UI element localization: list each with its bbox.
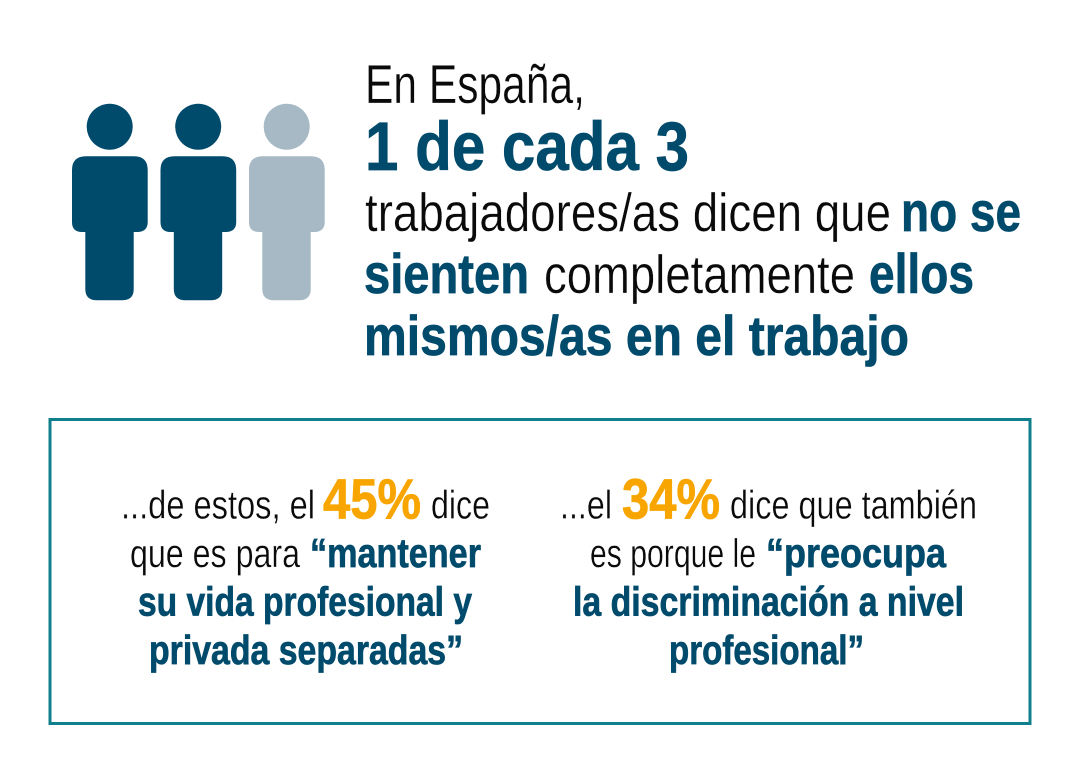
- heading line: trabajadores: trabajadores/as dicen que: [365, 183, 891, 243]
- line with 34% figure: dice que también: [730, 484, 977, 528]
- heading line: sienten completamente ellos: completamente: [544, 245, 855, 305]
- heading line: sienten completamente ellos: [364, 242, 974, 305]
- heading line: En España: En España,: [365, 53, 585, 115]
- text block: 45% statistic: “mantener: [310, 530, 481, 576]
- heading line: 1 de cada 3: 1 de cada 3: [365, 108, 689, 185]
- text block: 34% statistic: es porque le: [590, 532, 756, 576]
- icon group: three people, two highlighted: [72, 104, 325, 300]
- text block: 34% statistic: [560, 468, 977, 673]
- line with 34% figure: [560, 468, 977, 532]
- line with 45% figure: 45%: [323, 468, 421, 532]
- text block: 34% statistic: la discriminación a nivel: [573, 578, 964, 624]
- text block: 45% statistic: que es para: [130, 532, 301, 576]
- text block: 34% statistic: profesional”: [669, 627, 864, 673]
- icon: person 1: [72, 104, 148, 300]
- icon: person 2: [160, 104, 236, 300]
- line with 45% figure: dice: [431, 484, 490, 528]
- text block: 45% statistic: su vida profesional y: [138, 578, 472, 624]
- line with 34% figure: 34%: [622, 468, 720, 532]
- text block: 34% statistic: “preocupa: [766, 530, 947, 576]
- icon: person 3: [249, 104, 325, 300]
- heading line: sienten completamente ellos: sienten: [364, 242, 529, 305]
- text block: 45% statistic: privada separadas”: [149, 627, 463, 673]
- panel: statistics box: [50, 420, 1030, 724]
- line with 34% figure: ...el: [560, 484, 612, 528]
- heading line: sienten completamente ellos: ellos: [869, 242, 974, 305]
- line with 45% figure: ...de estos, el: [121, 484, 315, 528]
- text block: 45% statistic: [121, 468, 490, 673]
- line with 45% figure: [121, 468, 490, 532]
- heading line: mismos/as en el trabajo: mismos/as en el trabajo: [364, 304, 909, 367]
- heading statement: [364, 53, 1021, 367]
- heading line: trabajadores: no se: [901, 180, 1021, 243]
